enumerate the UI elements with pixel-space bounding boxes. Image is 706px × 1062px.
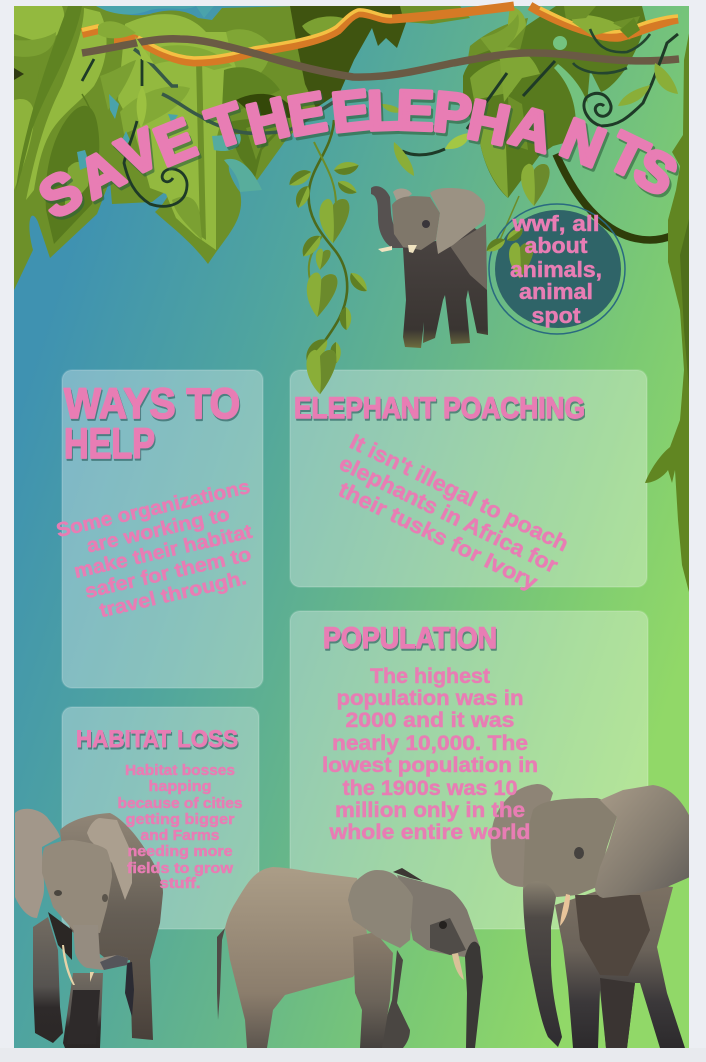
text: ways to help body: are working to bbox=[85, 503, 232, 558]
text: habitat loss body: happing bbox=[148, 778, 212, 795]
text: sources bbox=[510, 211, 602, 328]
text: habitat loss body: stuff. bbox=[160, 875, 200, 892]
photo: middle elephant bbox=[217, 867, 483, 1048]
text: ways to help body: make their habitat bbox=[72, 521, 255, 583]
text: habitat loss body: fields to grow bbox=[127, 860, 233, 877]
heading: elephant poaching: ELEPHANT POACHING bbox=[294, 392, 585, 425]
text: elephant poaching body: their tusks for Ivory bbox=[335, 477, 542, 595]
illustration: orange vine bbox=[82, 6, 678, 62]
photo: small elephant bbox=[371, 186, 488, 348]
text: sources: animals, bbox=[510, 257, 602, 282]
text: sources: wwf, all bbox=[511, 211, 600, 236]
text: elephant poaching body: It isn't illegal to poach bbox=[346, 429, 573, 556]
text: habitat loss body bbox=[118, 762, 242, 892]
page margin right bbox=[689, 0, 706, 1062]
title: SAVE THE ELEPHANTS bbox=[28, 77, 688, 230]
panel: habitat loss bbox=[62, 707, 259, 929]
text: population body bbox=[322, 665, 538, 844]
photo: right elephant bbox=[491, 784, 690, 1048]
text: habitat loss body: Habitat bosses bbox=[125, 762, 235, 779]
text: sources: about bbox=[524, 233, 588, 258]
text: population body: The highest bbox=[370, 665, 490, 688]
teal gaps bbox=[96, 6, 196, 14]
illustration: thick dark vine right bbox=[556, 154, 689, 240]
panel: ways to help bbox=[62, 370, 263, 688]
illustration: jungle leaves right bbox=[400, 6, 646, 198]
heading: ways to help: WAYS TO bbox=[64, 380, 240, 428]
panel: population bbox=[290, 611, 648, 929]
heading: population: POPULATION bbox=[323, 622, 497, 655]
text: elephant poaching body bbox=[325, 429, 573, 600]
text: population body: nearly 10,000. The bbox=[332, 732, 528, 755]
illustration: small hanging leaves near circle bbox=[500, 164, 550, 240]
text: habitat loss body: needing more bbox=[128, 843, 232, 860]
text: elephant poaching body: elephants in Africa for bbox=[335, 450, 562, 578]
text: ways to help body: safer for them to bbox=[83, 543, 253, 603]
text: ways to help body: travel through. bbox=[97, 567, 249, 622]
illustration: brown branch bbox=[82, 39, 679, 77]
light stripe gap bbox=[554, 64, 590, 140]
text: population body: the 1900s was 10 bbox=[342, 777, 518, 800]
text: population body: whole entire world bbox=[328, 821, 530, 844]
panel: elephant poaching bbox=[290, 370, 647, 587]
text: habitat loss body: because of cities bbox=[118, 795, 242, 812]
text: habitat loss body: and Farms bbox=[140, 827, 220, 844]
illustration: tree vine right edge bbox=[645, 28, 690, 596]
illustration: jungle leaves left bbox=[14, 6, 412, 290]
source badge circle bbox=[485, 204, 625, 334]
illustration: left tendrils and sprigs bbox=[82, 36, 340, 206]
text: population body: million only in the bbox=[335, 799, 525, 822]
text: sources: animal bbox=[519, 279, 593, 304]
heading: ways to help bbox=[64, 380, 240, 468]
photo: left elephant bbox=[15, 809, 163, 1048]
text: population body: population was in bbox=[336, 687, 524, 710]
text: population body: lowest population in bbox=[322, 754, 538, 777]
illustration: leaves on top of vine bbox=[98, 14, 640, 56]
text: sources: spot bbox=[532, 303, 581, 328]
heading: ways to help: HELP bbox=[64, 420, 155, 468]
illustration: right tendrils and leaves bbox=[381, 29, 678, 176]
text: ways to help body: Some organizations bbox=[54, 476, 252, 542]
text: ways to help body bbox=[54, 476, 272, 628]
text: population body: 2000 and it was bbox=[346, 709, 514, 732]
illustration: hanging vine with leaves bbox=[287, 120, 368, 394]
heading: habitat loss: HABITAT LOSS bbox=[76, 726, 238, 753]
text: habitat loss body: getting bigger bbox=[126, 811, 235, 828]
page margin bottom bbox=[0, 1048, 706, 1062]
